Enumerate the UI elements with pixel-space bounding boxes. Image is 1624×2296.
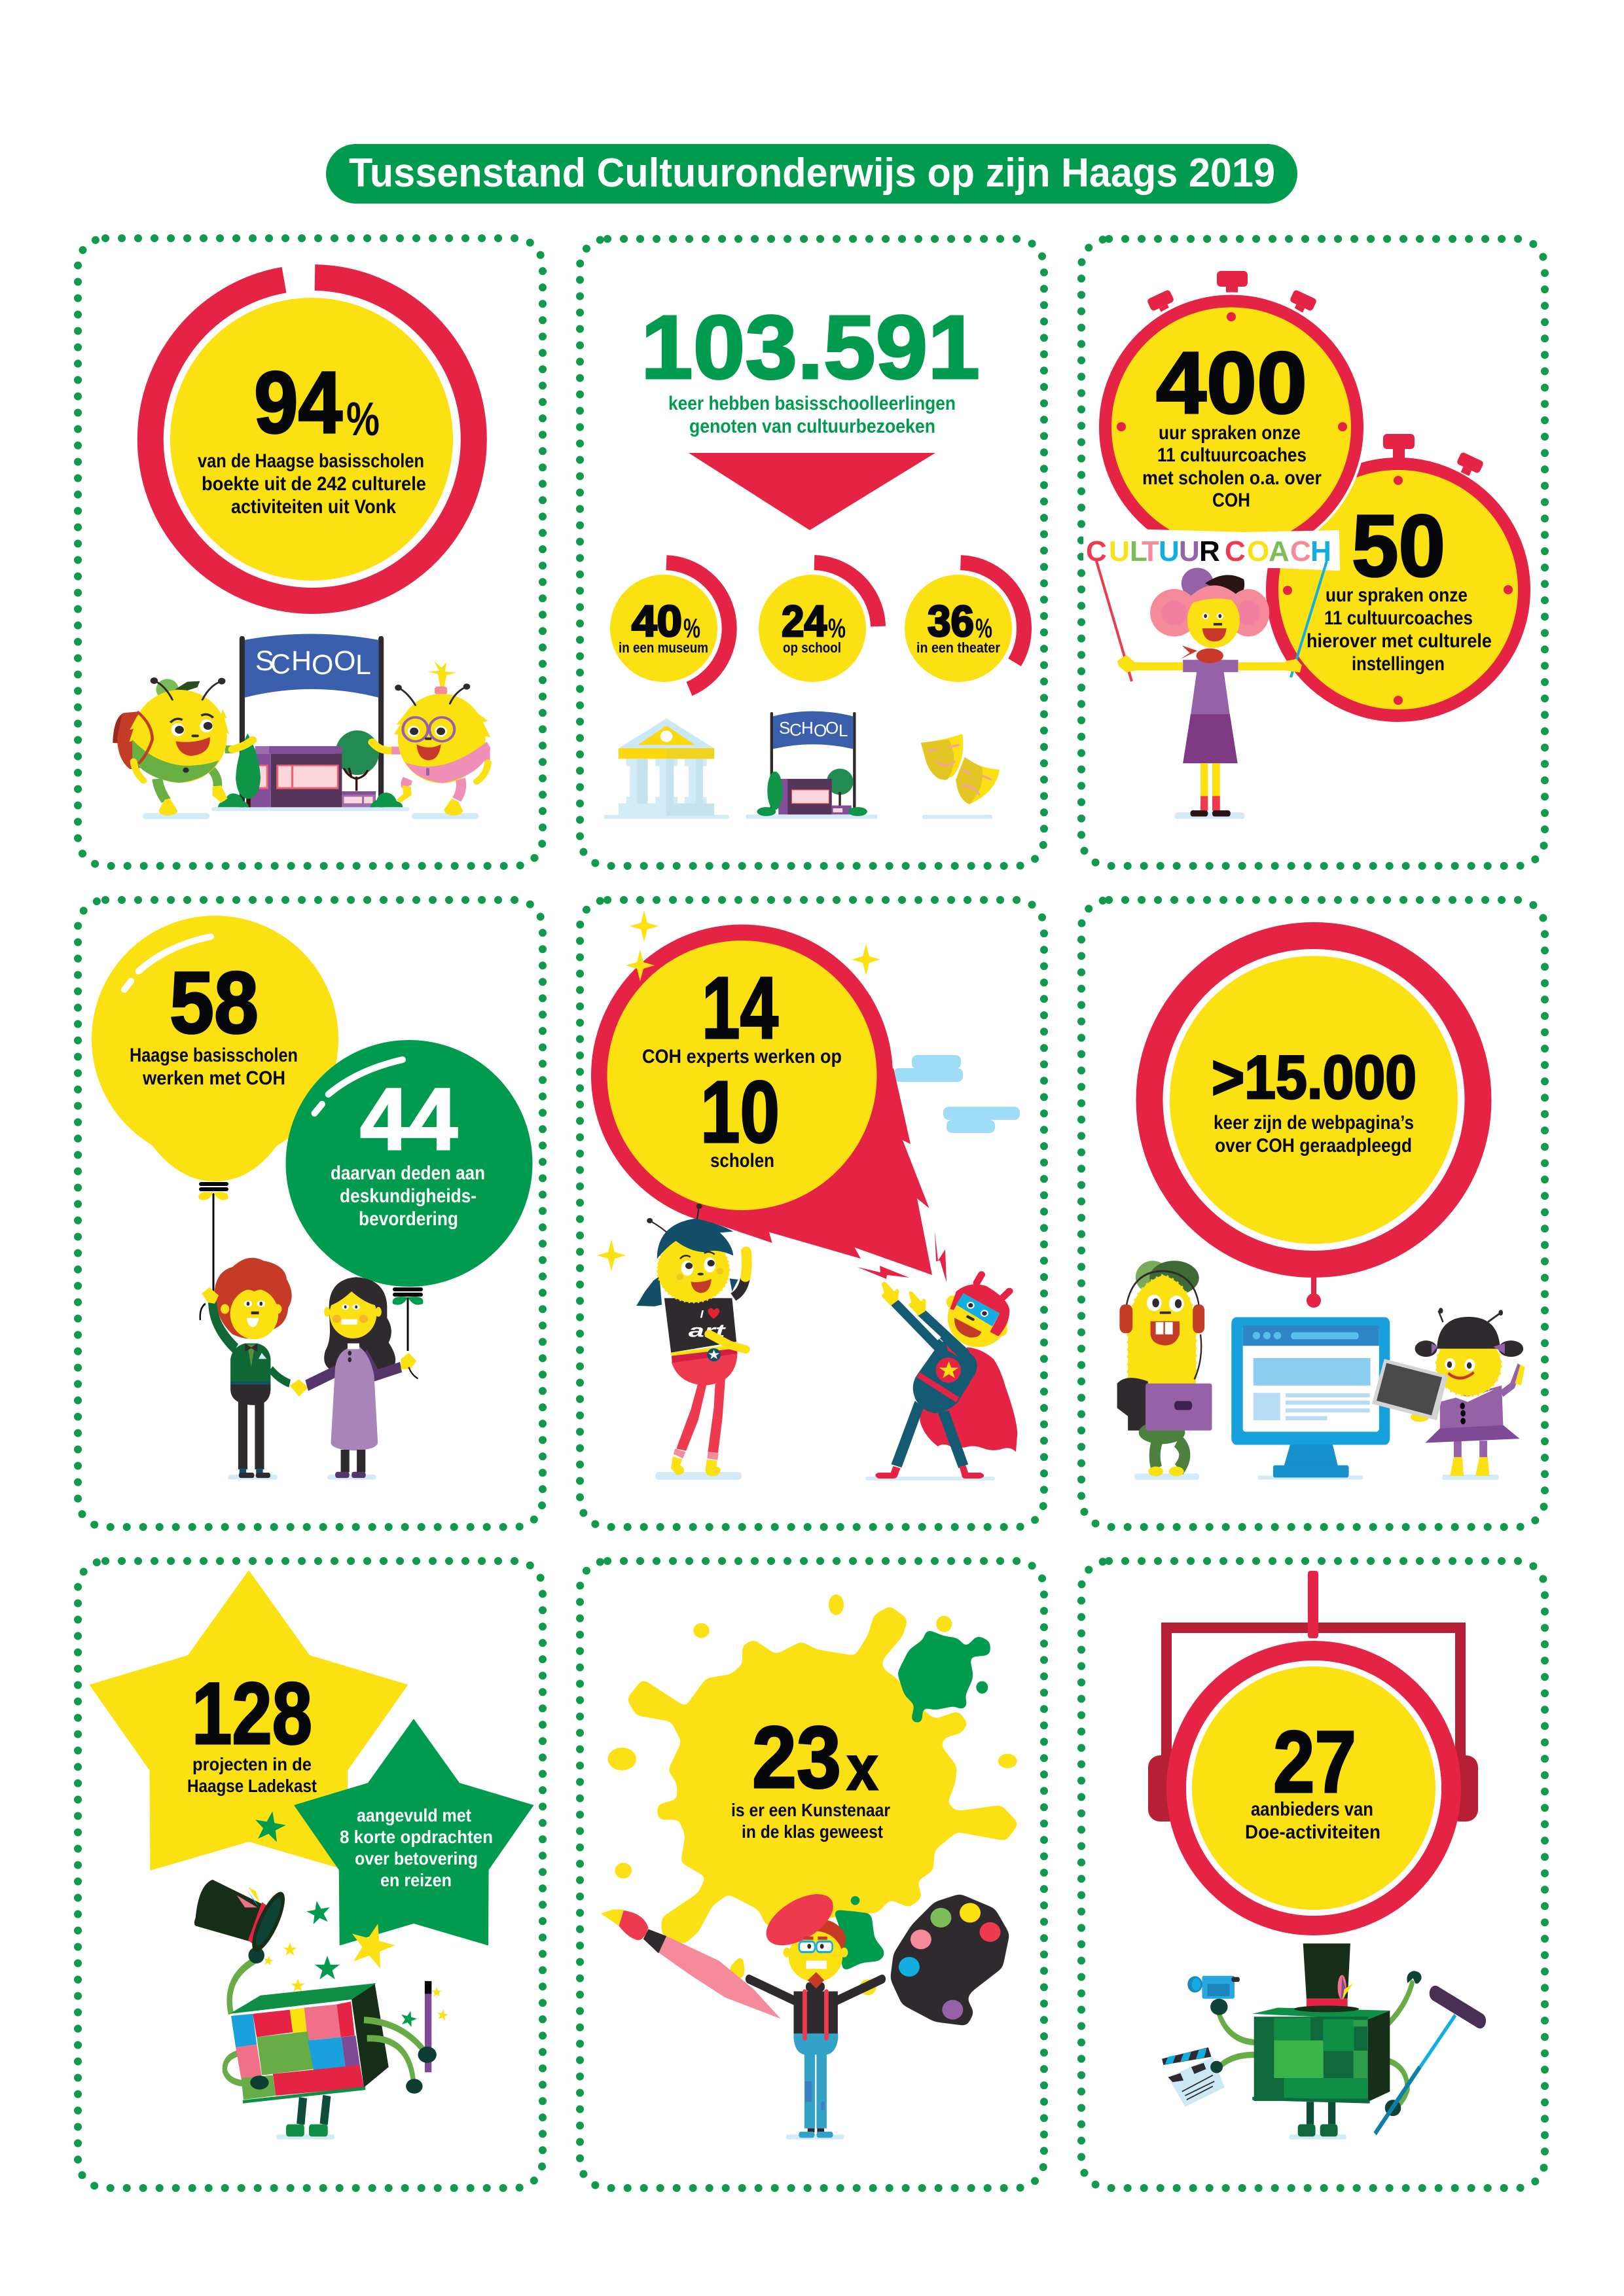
palette base <box>890 1894 1009 2026</box>
star: 128: projecten in de <box>192 1754 312 1774</box>
speech bubble with lightning tail: 14 <box>702 960 778 1057</box>
sign: cultuur coach <box>1083 528 1340 681</box>
arrow down <box>689 453 935 530</box>
stopwatch: 400 hours: met scholen o.a. over <box>1142 467 1322 489</box>
sign: cultuur coach: C <box>1290 535 1311 567</box>
stopwatch: 50 hours: 50 <box>1352 497 1445 595</box>
magic stars <box>252 1808 449 2028</box>
balloon: 58: werken met COH <box>142 1067 285 1089</box>
stopwatch: 400 hours: 400 <box>1156 334 1307 432</box>
description: genoten van cultuurbezoeken <box>689 416 935 437</box>
sign: cultuur coach: O <box>1247 535 1269 567</box>
school banner and posts <box>240 634 384 808</box>
star: 8 assignments: en reizen <box>380 1870 452 1890</box>
balloon: 44: daarvan deden aan <box>331 1162 485 1184</box>
balloon: 44 <box>285 1040 533 1351</box>
sparkles <box>597 910 880 1271</box>
donut: 36% theater: in een theater <box>916 639 1000 656</box>
stat 23x: 23 <box>752 1709 841 1806</box>
pin ring <box>1149 936 1478 1308</box>
speech bubble with lightning tail: scholen <box>710 1150 774 1172</box>
balloon: 58: Haagse basisscholen <box>130 1045 298 1066</box>
icon: theatre masks <box>921 734 1000 819</box>
description: boekte uit de 242 culturele <box>202 473 426 495</box>
panel: balloons 58 and 44 <box>78 900 543 1527</box>
school sign label: SCHOOL <box>779 718 848 740</box>
palette paint dots <box>899 1903 1001 2020</box>
donut: 40% museum <box>610 563 729 689</box>
sign: cultuur coach: T <box>1142 535 1159 567</box>
description: in de klas geweest <box>742 1821 883 1842</box>
donut: 36% theater: 36 <box>928 597 974 646</box>
sign: cultuur coach: L <box>1130 535 1147 567</box>
clouds <box>893 1055 1020 1133</box>
description <box>668 393 956 437</box>
stopwatch: 50 hours: uur spraken onze <box>1326 584 1468 606</box>
character: coach with pompom hair <box>1117 568 1302 819</box>
sign: cultuur coach: H <box>1310 535 1331 567</box>
stopwatch: 400 hours <box>1096 271 1366 562</box>
star: 8 assignments: over betovering <box>355 1848 478 1869</box>
description: keer hebben basisschoolleerlingen <box>668 393 956 414</box>
star: 8 assignments <box>294 1719 534 1945</box>
stat 94%: % <box>346 393 380 446</box>
pin ring: >15.000 <box>1212 1043 1416 1111</box>
donut: 36% theater: % <box>975 613 992 643</box>
pin ring: keer zijn de webpagina’s <box>1214 1112 1414 1134</box>
speech bubble with lightning tail <box>591 924 947 1282</box>
character: superhero <box>865 1274 1017 1480</box>
sign: cultuur coach: C <box>1225 535 1246 567</box>
headphones ring: 27 <box>1273 1713 1356 1811</box>
sign: cultuur coach: U <box>1159 535 1180 567</box>
panel: cultuurcoaches <box>1081 239 1545 866</box>
stopwatch: 50 hours: hierover met culturele <box>1307 630 1492 652</box>
donut: 40% museum: in een museum <box>619 639 708 656</box>
balloon: 44: 44 <box>360 1071 458 1168</box>
stopwatch: 400 hours: COH <box>1212 490 1250 511</box>
balloon: 58: 58 <box>170 954 259 1052</box>
stopwatch: 50 hours: 11 cultuurcoaches <box>1324 607 1473 629</box>
speech bubble with lightning tail: 10 <box>700 1064 780 1161</box>
panel: 27 providers <box>1081 1561 1545 2188</box>
character: rocker: art <box>689 1321 726 1341</box>
description <box>198 450 426 518</box>
description: activiteiten uit Vonk <box>231 496 396 518</box>
panel: >15.000 web pages <box>1081 900 1545 1527</box>
illustration: monitor, boy with headset, girl with tablet <box>1117 1261 1525 1480</box>
paint splat: green <box>833 1629 990 1971</box>
panel: 23x artist <box>580 1561 1044 2188</box>
sign: cultuur coach: R <box>1199 535 1220 567</box>
donut: 40% museum: 40 <box>632 597 682 646</box>
character: green cabinet with film gear <box>1162 1943 1480 2140</box>
title: Tussenstand Cultuuronderwijs op zijn Haags 2019 <box>349 151 1275 196</box>
sign: cultuur coach: C <box>1086 535 1107 567</box>
donut: 24% school: % <box>828 613 846 643</box>
paint splat: yellow <box>607 1594 1019 1996</box>
sign: cultuur coach: A <box>1269 535 1290 567</box>
stat 94%: 94 <box>254 354 342 452</box>
panel: 14 experts on 10 schools <box>580 900 1044 1527</box>
panel: 94% schools <box>78 238 543 866</box>
headphones ring: Doe-activiteiten <box>1245 1821 1380 1843</box>
panel: 128 projects <box>78 1561 543 2188</box>
character: artist <box>601 1884 882 2140</box>
pin ring: over COH geraadpleegd <box>1215 1135 1412 1157</box>
donut: 36% theater <box>905 563 1024 682</box>
illustration: school building and two characters <box>113 661 490 819</box>
star: 128: Haagse Ladekast <box>187 1776 317 1796</box>
sign: cultuur coach: U <box>1179 535 1200 567</box>
balloon: 58 <box>92 916 338 1293</box>
description: is er een Kunstenaar <box>731 1800 890 1820</box>
stopwatch: 50 hours <box>1272 434 1524 716</box>
panel: 103.591 visits <box>580 239 1044 866</box>
characters: boy and girl holding hands <box>200 1258 418 1480</box>
progress ring 94% <box>151 278 474 601</box>
icon: museum <box>604 719 729 819</box>
star: 128: 128 <box>192 1665 312 1763</box>
character: rocker <box>636 1204 747 1480</box>
school sign label: SCHOOL <box>255 645 371 681</box>
headphones ring <box>1148 1571 1478 1926</box>
stat 23x: x <box>847 1733 878 1803</box>
star: 128 <box>89 1570 408 1871</box>
balloon: 44: bevordering <box>359 1208 458 1230</box>
character: magic drawer cabinet <box>194 1880 437 2140</box>
icon: school <box>746 711 877 819</box>
description: van de Haagse basisscholen <box>198 450 424 472</box>
donut: 40% museum: % <box>683 613 700 643</box>
headphones ring: aanbieders van <box>1251 1799 1373 1820</box>
stopwatch: 400 hours: 11 cultuurcoaches <box>1157 444 1307 466</box>
star: 8 assignments: aangevuld met <box>357 1805 471 1825</box>
star: 8 assignments: 8 korte opdrachten <box>340 1827 493 1847</box>
donut: 24% school: op school <box>783 639 841 656</box>
character: rocker: I <box>700 1308 704 1320</box>
yellow disc <box>170 298 453 581</box>
stopwatch: 50 hours: instellingen <box>1352 653 1445 675</box>
stopwatch: 400 hours: uur spraken onze <box>1159 422 1301 444</box>
donut: 24% school: 24 <box>782 597 827 646</box>
balloon: 44: deskundigheids- <box>340 1185 477 1207</box>
description <box>731 1800 890 1842</box>
donut: 24% school <box>759 563 878 682</box>
stat 103.591: 103.591 <box>641 297 980 398</box>
sign: cultuur coach: U <box>1109 535 1130 567</box>
speech bubble with lightning tail: COH experts werken op <box>642 1046 842 1067</box>
